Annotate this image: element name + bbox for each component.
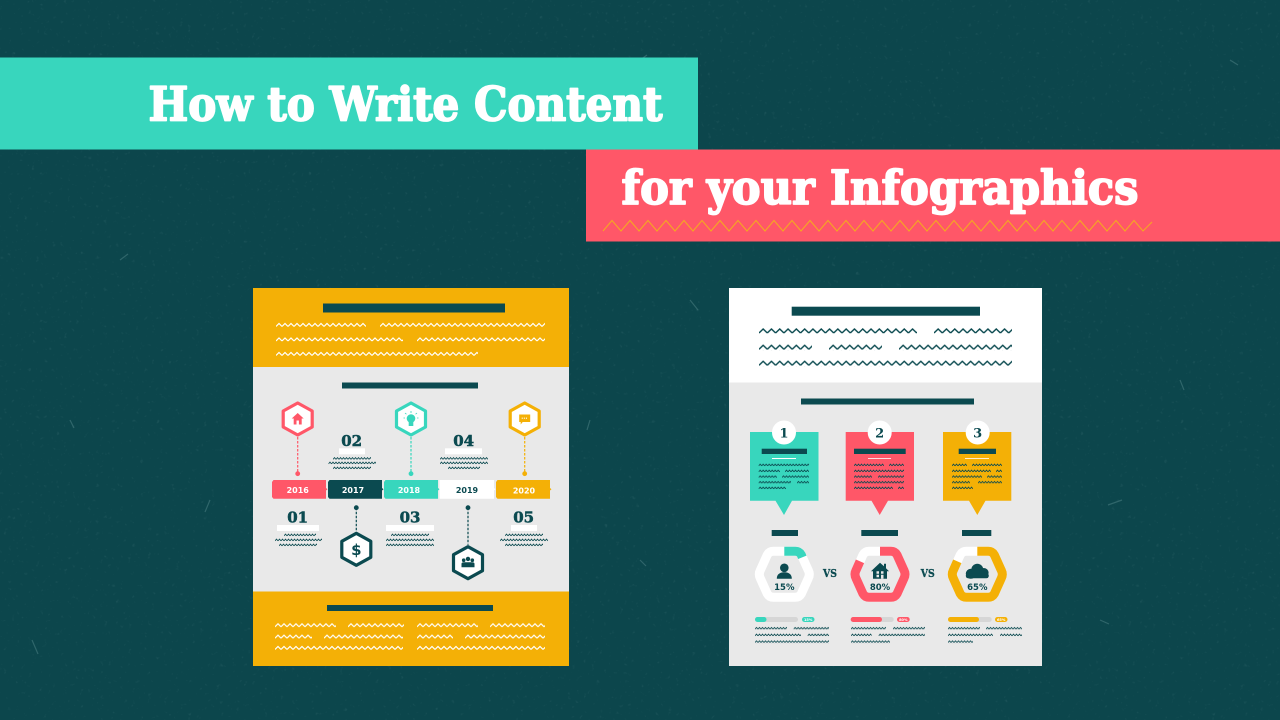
- stat block 1: 15%: [804, 618, 813, 622]
- timeline heading bar: [342, 382, 478, 388]
- donut hexagon: 65%: [952, 551, 1002, 597]
- stat block 3: [948, 617, 1022, 643]
- step 04: 04: [453, 432, 474, 450]
- year ribbon: 2016: [287, 486, 309, 495]
- card 3: [943, 420, 1011, 515]
- donut hexagon: 80%: 80%: [870, 583, 891, 593]
- stat block 2: 80%: [899, 618, 908, 622]
- year ribbon: 2020: [513, 486, 536, 495]
- card 3: 3: [973, 426, 982, 442]
- donut hexagon: 15%: 15%: [774, 583, 795, 593]
- card 1: [750, 420, 818, 515]
- title line 2: for your Infographics: [622, 161, 1138, 216]
- icon: person: [777, 564, 792, 579]
- header band: [253, 288, 569, 367]
- year ribbon: [272, 480, 552, 499]
- icon: people hexagon: [454, 505, 482, 579]
- step 03: 03: [400, 508, 420, 526]
- icon: bulb hexagon: [396, 403, 426, 476]
- title line 1: How to Write Content: [148, 78, 663, 132]
- ring label bars: [772, 530, 991, 536]
- card 2: 2: [875, 426, 884, 442]
- stat block 2: [851, 617, 925, 643]
- icon: home hexagon: [283, 403, 312, 476]
- stat block 1: [755, 617, 829, 643]
- vs label 2: VS: [920, 567, 935, 580]
- year ribbon: 2019: [456, 486, 479, 495]
- footer band: [253, 592, 569, 666]
- donut hexagon: 65%: 65%: [967, 583, 988, 593]
- icon: chat hexagon: [510, 403, 539, 476]
- donut hexagon: 15%: [759, 551, 809, 597]
- step 05: [500, 508, 548, 546]
- vs label 1: VS: [822, 567, 837, 580]
- title banner: red: [586, 150, 1280, 242]
- icon: house: [871, 563, 889, 579]
- icon: cloud: [966, 564, 989, 579]
- card 1: 1: [779, 426, 789, 442]
- comparison heading bar: [801, 398, 974, 404]
- step 01: [275, 508, 322, 546]
- step 02: [328, 432, 376, 470]
- icon: dollar hexagon: $: [351, 541, 362, 559]
- icon: dollar hexagon: [342, 505, 371, 565]
- year ribbon: 2018: [398, 486, 421, 495]
- donut hexagon: 80%: [855, 551, 905, 597]
- step 05: 05: [513, 508, 534, 526]
- step 01: 01: [287, 508, 308, 526]
- title banner: teal: [0, 58, 698, 150]
- step 02: 02: [341, 432, 362, 450]
- stat block 3: 65%: [997, 618, 1006, 622]
- card 2: [846, 420, 914, 515]
- zigzag underline: [603, 220, 1152, 231]
- step 03: [386, 508, 434, 546]
- year ribbon: 2017: [342, 486, 364, 495]
- panel: comparison infographic: [729, 288, 1042, 666]
- step 04: [440, 432, 488, 470]
- header block: [729, 288, 1042, 382]
- panel: timeline infographic: [253, 288, 569, 666]
